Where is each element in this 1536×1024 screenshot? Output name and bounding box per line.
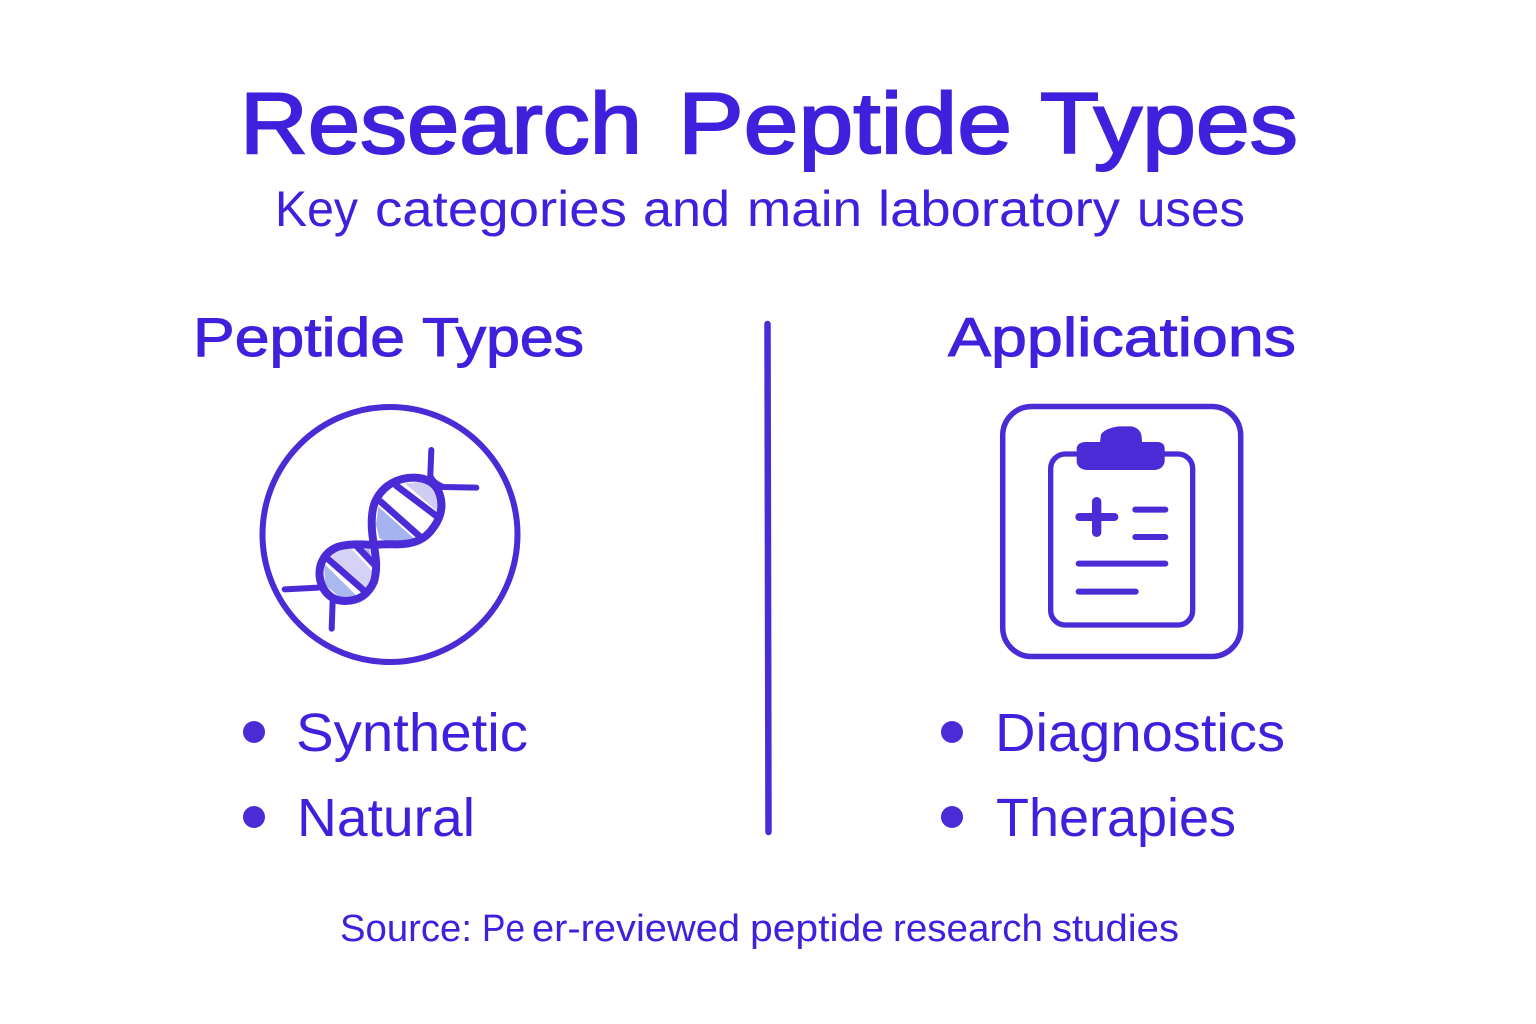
heading: peptide types: Peptide [193, 306, 405, 368]
list: applications: Diagnostics [995, 703, 1285, 763]
source note: Source: [340, 908, 472, 950]
title: Types [1040, 76, 1298, 172]
list: peptide types: Synthetic [296, 703, 528, 763]
subtitle: categories [375, 181, 627, 237]
source note: Pe [482, 908, 525, 950]
subtitle [275, 181, 1245, 237]
title: Peptide [678, 76, 1012, 172]
icon: medical clipboard [1003, 406, 1241, 656]
subtitle: main [747, 181, 862, 237]
title: Research [240, 76, 642, 172]
list: applications [941, 703, 1285, 848]
source note [340, 908, 1179, 950]
icon: dna helix in circle [262, 407, 518, 662]
source note: er-reviewed [532, 908, 740, 950]
list: peptide types: Natural [297, 788, 475, 848]
subtitle: uses [1137, 181, 1245, 237]
source note: peptide [750, 908, 884, 950]
source note: research [893, 908, 1043, 950]
subtitle: Key [275, 181, 358, 237]
divider [768, 324, 769, 832]
heading: peptide types [193, 306, 584, 368]
clipboard clip [1077, 426, 1165, 470]
list: applications: Therapies [996, 788, 1236, 848]
title [240, 76, 1298, 172]
source note: studies [1052, 908, 1179, 950]
subtitle: laboratory [878, 181, 1120, 237]
heading: peptide types: Types [422, 306, 584, 368]
heading: applications: Applications [948, 306, 1296, 368]
subtitle: and [643, 181, 730, 237]
list: peptide types [243, 703, 528, 848]
